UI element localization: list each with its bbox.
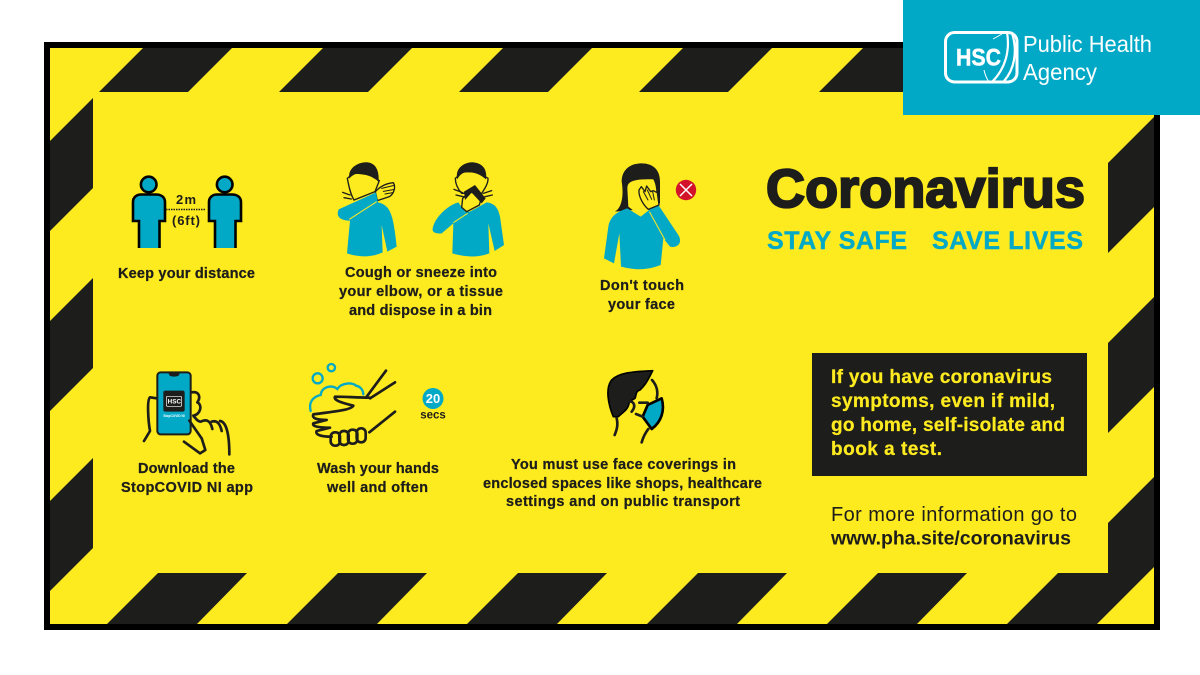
label: Keep your distance [118,266,255,282]
icon: head with face mask [608,371,663,442]
panel: symptoms callout: If you have coronavirus [831,367,1052,388]
panel: wash hands [310,364,446,496]
logo wordmark: Public Health [1023,31,1152,57]
panel: cough or sneeze [338,162,504,319]
icon: phone in hand: StopCOVID NI [163,413,185,418]
logo wordmark: Agency [1023,59,1097,85]
title: Coronavirus [766,159,1085,219]
label: your elbow, or a tissue [339,284,503,300]
icon: 20 secs [420,388,446,422]
icon: two people 2m apart: (6ft) [172,213,200,228]
subtitle: SAVE LIVES [932,227,1083,255]
subtitle [767,227,1083,255]
label: Don't touch [600,278,684,294]
label: Download the [138,461,235,477]
more information text [830,504,1077,550]
icon: person sneezing into tissue [433,162,504,256]
icon: two people 2m apart: 2m [176,192,196,207]
panel: face coverings [483,371,762,510]
panel: symptoms callout: symptoms, even if mild, [831,391,1055,412]
hazard frame [47,45,1157,627]
icon: phone in hand: HSC [168,399,181,406]
label: Cough or sneeze into [345,265,497,281]
label: StopCOVID NI app [121,480,253,496]
panel: don't touch your face [600,163,696,313]
label: your face [608,297,675,313]
icon: HSC logo: HSC [956,44,1001,72]
icon: washing hands with foam [310,364,395,446]
label: You must use face coverings in [511,457,736,473]
icon: 20 secs: 20 [426,391,440,406]
subtitle: STAY SAFE [767,227,907,255]
more information text: For more information go to [831,504,1077,526]
panel: symptoms callout [812,353,1087,476]
icon: HSC logo [946,32,1017,82]
more information text: www.pha.site/coronavirus [830,528,1071,550]
label [317,461,439,496]
icon: person touching face [604,163,680,269]
label: Wash your hands [317,461,439,477]
label: and dispose in a bin [349,303,492,319]
label: enclosed spaces like shops, healthcare [483,476,762,492]
icon: red cross [676,180,696,200]
logo wordmark [1023,31,1152,85]
panel: keep your distance [118,177,255,282]
icon: two people 2m apart [133,177,241,248]
label [600,278,684,313]
panel: symptoms callout: go home, self-isolate and [831,415,1065,436]
icon: 20 secs: secs [420,410,446,422]
panel: symptoms callout: book a test. [831,439,942,460]
panel: download the app [121,372,253,496]
logo panel [903,0,1200,115]
label: settings and on public transport [506,494,740,510]
label: well and often [326,480,428,496]
icon: person coughing into elbow [338,162,397,256]
label [121,461,253,496]
label [339,265,503,319]
icon: phone in hand [144,372,229,454]
label [483,457,762,510]
